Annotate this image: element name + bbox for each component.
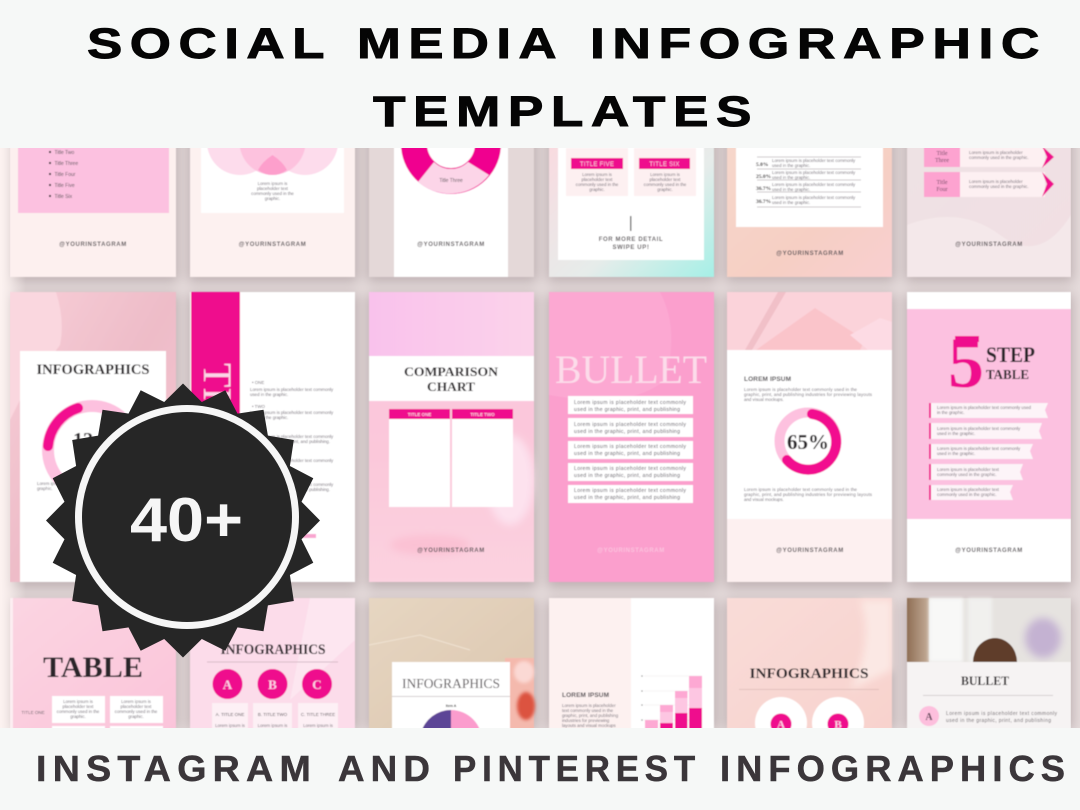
title: SOCIAL	[87, 21, 332, 68]
card: title sidebar: Lorem ipsum is placeholder text commonly	[250, 434, 334, 439]
card: donut segments: @YOURINSTAGRAM	[417, 242, 485, 248]
card: title sidebar: used in the graphic, print, and publishing.	[250, 487, 330, 492]
card: percent list: used in the graphic.	[772, 200, 810, 205]
card: table: TITLE ONE	[21, 710, 45, 715]
card: swipe up: FOR MORE DETAIL	[599, 237, 663, 243]
card: 5 step table: @YOURINSTAGRAM	[955, 548, 1023, 554]
card: infographics A B C: INFOGRAPHICS	[220, 642, 326, 658]
card: 5 step table: STEP	[986, 342, 1035, 367]
card: 5 step table	[907, 292, 1071, 582]
card: percent list: @YOURINSTAGRAM	[776, 251, 844, 257]
card: title chevrons	[907, 130, 1071, 277]
card: title sidebar: Lorem ipsum is placeholder text commonly	[250, 482, 334, 487]
footer band	[0, 728, 1080, 810]
card: 65 percent donut: and visual mockups.	[744, 497, 784, 502]
card: 65 percent donut: LOREM IPSUM	[744, 376, 791, 383]
card: title sidebar: • ONE	[252, 380, 264, 385]
card: comparison chart: CHART	[427, 379, 475, 394]
card: swipe up: Lorem ipsum is	[582, 172, 613, 177]
card: bullet list: used in the graphic, print, and publishing	[574, 495, 680, 501]
card: percent list: 25.0%	[756, 174, 771, 180]
card: swipe up: graphic.	[589, 187, 605, 192]
card: bullet list: Lorem ipsum is placeholder text commonly	[574, 444, 686, 450]
card: venn diagram: Lorem ipsum is	[258, 181, 288, 186]
card: bullet photo	[907, 598, 1071, 733]
card: 65 percent donut: graphic, print, and publishing industries for previewing layouts	[744, 492, 873, 497]
card: bullet list: used in the graphic, print, and publishing	[574, 407, 680, 413]
title: INFOGRAPHIC	[590, 21, 1047, 68]
card: percent list: 36.7%	[756, 186, 771, 192]
subtitle: INFOGRAPHICS	[720, 748, 1071, 789]
card: bullet list: Lorem ipsum is placeholder text commonly	[574, 400, 686, 406]
card: infographics A B C: B. TITLE TWO	[258, 712, 288, 717]
card: venn diagram	[190, 109, 355, 277]
card: stacked bar chart: layouts and visual mockups	[562, 723, 616, 728]
card: table: placeholder text	[62, 704, 94, 709]
card: swipe up: graphic.	[657, 187, 673, 192]
card: bullet list: Lorem ipsum is placeholder text commonly	[574, 466, 686, 472]
card: infographics A B C: A. TITLE ONE	[216, 712, 244, 717]
card: 65 percent donut: Lorem ipsum is placeholder text commonly used in the	[744, 387, 858, 392]
card: 65 percent donut	[727, 292, 892, 582]
card: infographics A B C	[190, 598, 355, 733]
card: percent list: Lorem ipsum is placeholder text commonly	[772, 158, 856, 163]
card: donut segments: Title Three	[439, 178, 463, 184]
card: title chevrons: commonly used in the graphic.	[969, 184, 1029, 189]
card: title list: Title Three	[54, 161, 78, 167]
card: infographics circles: A	[777, 719, 785, 731]
card: 5 step table: TABLE	[986, 368, 1029, 383]
card: bullet list: Lorem ipsum is placeholder text commonly	[574, 422, 686, 428]
card: percent list: Lorem ipsum is placeholder text commonly	[772, 195, 856, 200]
card: donut segments	[369, 107, 534, 277]
card: stacked bar chart	[549, 598, 714, 733]
card: bullet photo: used in the graphic, print, and publishing	[946, 718, 1051, 724]
subtitle	[36, 748, 1071, 789]
card: infographics A B C: C. TITLE THREE	[301, 712, 335, 717]
card: bullet photo: BULLET	[961, 674, 1010, 688]
card: title list: Title Five	[54, 183, 75, 189]
card: pie chart: Item A	[446, 704, 457, 708]
card: title sidebar: used in the graphic.	[250, 392, 288, 397]
card: comparison chart: TITLE TWO	[470, 412, 495, 417]
card: swipe up: Lorem ipsum is	[650, 172, 681, 177]
card: 65 percent donut: Lorem ipsum is placeholder text commonly used in the	[744, 487, 858, 492]
card: title sidebar: used in the graphic.	[250, 415, 288, 420]
card: title list	[10, 130, 176, 277]
card: infographics A B C: Lorem ipsum is	[258, 723, 288, 728]
badge: 40+	[46, 384, 320, 658]
card: 5 step table: Lorem ipsum is placeholder text	[937, 487, 1000, 492]
card: swipe up: TITLE FIVE	[580, 162, 614, 168]
card: venn diagram: commonly used in the	[251, 191, 294, 196]
card: swipe up	[549, 130, 714, 277]
card: swipe up: TITLE SIX	[649, 162, 680, 168]
card: 5 step table: commonly used in the graphic.	[937, 472, 997, 477]
card: title chevrons: Title	[936, 180, 948, 186]
card: infographics A B C: B	[268, 677, 277, 692]
card: title sidebar	[190, 292, 355, 582]
badge: 40+: 40+	[130, 486, 243, 555]
card: table: Lorem ipsum is	[63, 699, 94, 704]
card: venn diagram: @YOURINSTAGRAM	[239, 242, 306, 248]
card: bullet list: used in the graphic, print, and publishing	[574, 429, 680, 435]
card: title chevrons: Three	[935, 158, 949, 164]
card: title chevrons: commonly used in the graphic.	[969, 155, 1029, 160]
card: bullet list: Lorem ipsum is placeholder text commonly	[574, 488, 686, 494]
card: bullet list: @YOURINSTAGRAM	[597, 548, 665, 554]
card: bullet list: BULLET	[555, 347, 707, 392]
card: infographics gauge: INFOGRAPHICS	[36, 362, 150, 378]
card: 5 step table: Lorem ipsum is placeholder text commonly	[937, 426, 1021, 431]
card: title chevrons: Lorem ipsum is placeholder	[969, 150, 1023, 155]
card: percent list: Lorem ipsum is placeholder text commonly	[772, 170, 856, 175]
card: title sidebar: Lorem ipsum is placeholder text commonly	[250, 410, 334, 415]
card: 5 step table: Lorem ipsum is placeholder text	[937, 467, 1000, 472]
card: swipe up: placeholder text	[582, 177, 613, 182]
card: bullet photo: Lorem ipsum is placeholder text commonly	[946, 711, 1058, 717]
title	[87, 21, 1047, 136]
card: 5 step table: commonly used in the graphic.	[937, 492, 997, 497]
card: 65 percent donut: graphic, print, and publishing industries for previewing layouts	[744, 392, 873, 397]
card: title list: @YOURINSTAGRAM	[59, 242, 127, 248]
card: infographics circles	[727, 598, 892, 749]
card: infographics circles: INFOGRAPHICS	[750, 666, 868, 682]
card: pie chart: INFOGRAPHICS	[402, 677, 500, 692]
card: table: Lorem ipsum is	[121, 699, 152, 704]
card: table: graphic.	[128, 714, 144, 719]
card: stacked bar chart: graphic, print, and publishing	[562, 713, 619, 718]
card: comparison chart: TITLE ONE	[408, 412, 431, 417]
card: title sidebar: Lorem ipsum is placeholder text commonly	[250, 387, 334, 392]
card: bullet list	[549, 292, 714, 582]
card: bullet list: used in the graphic, print, and publishing	[574, 473, 680, 479]
card: 65 percent donut: and visual mockups.	[744, 397, 784, 402]
card: title sidebar: • TWO	[252, 404, 266, 409]
card: infographics circles: B	[834, 719, 842, 731]
card: title chevrons: Title	[936, 151, 948, 157]
subtitle: INSTAGRAM	[36, 748, 317, 789]
card: title list: Title Six	[54, 194, 73, 200]
card: 65 percent donut: @YOURINSTAGRAM	[776, 548, 844, 554]
card: infographics gauge	[10, 292, 176, 582]
card: swipe up: placeholder text	[650, 177, 681, 182]
card: title chevrons: Lorem ipsum is placeholder	[969, 179, 1023, 184]
card: 5 step table: used in the graphic.	[937, 451, 975, 456]
card: comparison chart: COMPARISON	[404, 364, 499, 379]
subtitle: AND	[338, 748, 436, 789]
card: bullet list: used in the graphic, print, and publishing	[574, 451, 680, 457]
title: MEDIA	[357, 21, 564, 68]
card: swipe up: SWIPE UP!	[613, 245, 649, 251]
card: stacked bar chart: text commonly used in the	[562, 708, 614, 713]
card: table: commonly used in the	[57, 709, 100, 714]
card: table: placeholder text	[120, 704, 152, 709]
card: title list: Title Two	[54, 150, 74, 156]
card: 5 step table: Lorem ipsum is placeholder text commonly used	[937, 405, 1032, 410]
card: percent list	[727, 130, 892, 277]
card: comparison chart: @YOURINSTAGRAM	[417, 548, 485, 554]
card: pie chart	[369, 598, 535, 772]
card: stacked bar chart: industries for previewing	[562, 718, 610, 723]
card: title list: Title Four	[54, 172, 76, 178]
title: TEMPLATES	[373, 89, 759, 136]
card: table: graphic.	[70, 714, 86, 719]
card: table: commonly used in the	[115, 709, 158, 714]
card: 5 step table: used in the graphic.	[937, 431, 975, 436]
card: 65 percent donut: 65%	[787, 430, 829, 454]
card: title sidebar: TITLE	[195, 363, 240, 474]
card: percent list: 5.0%	[756, 162, 768, 168]
card: 5 step table: in the graphic.	[937, 410, 965, 415]
card: infographics A B C: Lorem ipsum is	[215, 723, 246, 728]
card: title sidebar: used in the graphic, print, and publishing.	[250, 439, 330, 444]
card: venn diagram: placeholder text	[257, 186, 289, 191]
card: table: TABLE	[43, 651, 143, 684]
card: swipe up: commonly used in the	[644, 182, 687, 187]
card: infographics gauge: Lorem ipsum is placeholder	[37, 481, 91, 486]
card: comparison chart	[369, 292, 534, 582]
card: bullet photo: A	[925, 712, 933, 723]
card: stacked bar chart: LOREM IPSUM	[562, 692, 609, 699]
card: percent list: 36.7%	[756, 199, 771, 205]
card: title chevrons: Four	[936, 187, 948, 193]
card: percent list: used in the graphic.	[772, 175, 810, 180]
card: title chevrons: @YOURINSTAGRAM	[955, 242, 1023, 248]
card: percent list: Lorem ipsum is placeholder text commonly	[772, 182, 856, 187]
card: venn diagram: graphic.	[265, 196, 280, 201]
card: percent list: used in the graphic.	[772, 187, 810, 192]
card: table	[10, 598, 176, 734]
card: infographics gauge: graphic.	[37, 486, 53, 491]
card: title sidebar: Lorem ipsum is placeholder text commonly	[250, 458, 334, 463]
card: stacked bar chart: Lorem ipsum is placeholder	[562, 703, 616, 708]
card: infographics A B C: A	[223, 677, 233, 692]
card: 5 step table: 5	[948, 323, 984, 403]
card: infographics A B C: Lorem ipsum is	[303, 723, 334, 728]
card: 5 step table: Lorem ipsum is placeholder text commonly	[937, 446, 1021, 451]
card: percent list: used in the graphic.	[772, 163, 810, 168]
card: infographics A B C: C	[312, 677, 322, 692]
card: swipe up: commonly used in the	[576, 182, 619, 187]
subtitle: PINTEREST	[453, 748, 701, 789]
card: infographics gauge: 12	[73, 429, 93, 451]
header band	[0, 0, 1080, 148]
